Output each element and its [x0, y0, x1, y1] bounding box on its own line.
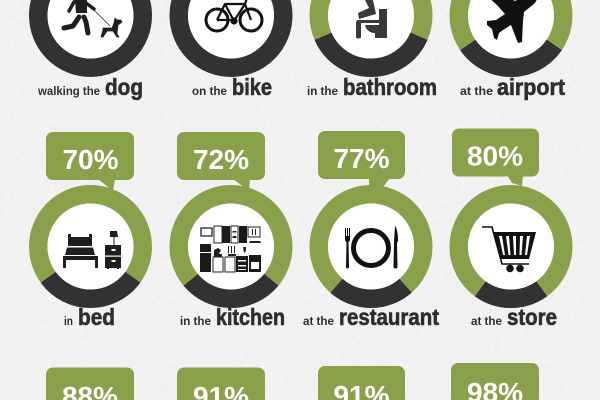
label: at the store: store	[507, 304, 557, 330]
label: in the bathroom: in the	[307, 84, 338, 98]
item: on the bike	[179, 0, 283, 100]
callout: 70%: 70%	[62, 144, 119, 175]
label: on the bike	[192, 74, 272, 100]
icon: person on toilet	[356, 0, 387, 38]
label: at the restaurant: at the	[303, 314, 334, 328]
item: at the airport	[459, 0, 565, 100]
label: at the restaurant	[303, 304, 439, 330]
callout: 88%	[46, 368, 134, 400]
donut: 77 percent	[319, 194, 423, 299]
callout: 80%: 80%	[467, 140, 523, 172]
label: at the airport	[460, 74, 565, 100]
donut: 69 percent	[459, 0, 563, 68]
callout: 98%	[451, 363, 539, 400]
label: in bed	[64, 304, 115, 330]
label: in bed: in	[64, 314, 73, 328]
donut: on the bike	[179, 0, 283, 68]
label: in the bathroom: bathroom	[343, 74, 437, 100]
callout: 72%: 72%	[193, 144, 249, 175]
donut: 63 percent	[319, 0, 423, 68]
label: at the airport: airport	[497, 74, 565, 100]
callout: 77%: 77%	[333, 143, 390, 174]
item: in the bathroom	[307, 0, 437, 100]
label: walking the dog	[37, 74, 143, 100]
label: walking the dog: dog	[105, 74, 143, 100]
callout: 80%	[452, 128, 539, 186]
item: walking the dog	[37, 0, 143, 100]
donut: walking the dog	[38, 0, 143, 68]
donut: 70 percent	[38, 194, 143, 299]
label: at the restaurant: restaurant	[339, 304, 439, 330]
label: on the bike: bike	[232, 74, 272, 100]
icon: bicycle	[206, 0, 262, 31]
donut: 72 percent	[179, 194, 283, 299]
icon: kitchen	[200, 226, 261, 272]
label: in the kitchen: kitchen	[216, 304, 285, 330]
label: walking the dog: walking the	[37, 84, 100, 98]
label: at the store: at the	[471, 314, 502, 328]
callout: 70%	[46, 132, 134, 191]
label: in the kitchen	[180, 304, 285, 330]
callout: 91% second column	[177, 368, 265, 400]
callout: 72%	[177, 132, 265, 191]
item: 70 percent in bed	[38, 132, 143, 330]
callout: 77%	[318, 131, 405, 187]
label: on the bike: on the	[192, 84, 227, 98]
icon: bed and nightstand	[63, 231, 121, 269]
label: in the kitchen: in the	[180, 314, 211, 328]
icon: plate, fork and knife	[345, 226, 398, 268]
label: at the airport: at the	[460, 84, 493, 98]
label: in the bathroom	[307, 74, 437, 100]
donut: 80 percent	[459, 194, 563, 299]
item: 77 percent at the restaurant	[303, 131, 439, 330]
icon: person walking dog	[64, 0, 122, 37]
label: in bed: bed	[78, 304, 115, 330]
item: 80 percent at the store	[452, 128, 563, 330]
icon: airplane	[487, 0, 542, 43]
icon: shopping cart	[482, 227, 536, 272]
callout: 91% third column	[318, 366, 405, 400]
item: 72 percent in the kitchen	[177, 132, 285, 330]
label: at the store	[471, 304, 557, 330]
